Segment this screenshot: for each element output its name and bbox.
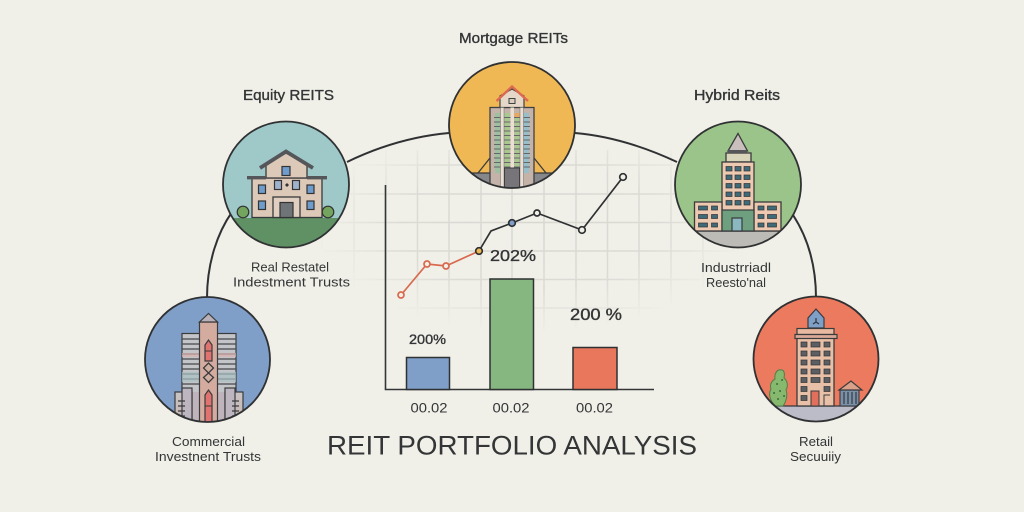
caption: commercial trusts: Investnent Trusts [155, 450, 261, 464]
heading: hybrid REITs: Hybrid Reits [694, 88, 780, 104]
caption: retail security: Secuuiiy [790, 450, 842, 464]
icon: retail tower [750, 296, 882, 424]
chart axes [386, 185, 654, 390]
value label: red bar: 200 % [570, 306, 622, 324]
panel: hybrid REITs [670, 88, 806, 290]
heading: equity REITs: Equity REITS [243, 88, 334, 104]
caption: hybrid REITs: Industrriadl [701, 260, 771, 275]
icon: commercial tower [145, 297, 270, 424]
icon: hybrid tower [670, 122, 806, 251]
panel: retail security [750, 296, 882, 464]
panel: commercial trusts [145, 297, 270, 464]
connecting arc [207, 133, 816, 298]
caption: retail security: Retail [799, 435, 833, 449]
value label: green bar: 202% [490, 248, 536, 265]
heading: mortgage REITs: Mortgage REITs [459, 31, 568, 47]
value label: blue bar: 200% [409, 332, 446, 347]
bar: green [490, 279, 534, 390]
icon: mortgage tower [445, 62, 579, 192]
icon: house building [220, 122, 352, 250]
x axis labels: 00.02 [576, 400, 613, 416]
chart: bars and trend line [386, 174, 654, 416]
bar: red [573, 348, 617, 390]
caption: commercial trusts: Commercial [172, 435, 245, 449]
caption: equity REITs: Real Restatel [251, 260, 329, 274]
caption: equity REITs: Indestment Trusts [233, 274, 351, 290]
panel: equity REITs [220, 88, 352, 290]
title: REIT PORTFOLIO ANALYSIS [327, 430, 697, 460]
caption: hybrid REITs: Reesto'nal [706, 275, 766, 290]
trend line [398, 174, 626, 298]
x axis labels [410, 400, 613, 416]
x axis labels: 00.02 [410, 400, 448, 416]
panel: mortgage REITs [445, 31, 579, 192]
x axis labels: 00.02 [492, 400, 530, 416]
bar: blue [406, 358, 450, 390]
